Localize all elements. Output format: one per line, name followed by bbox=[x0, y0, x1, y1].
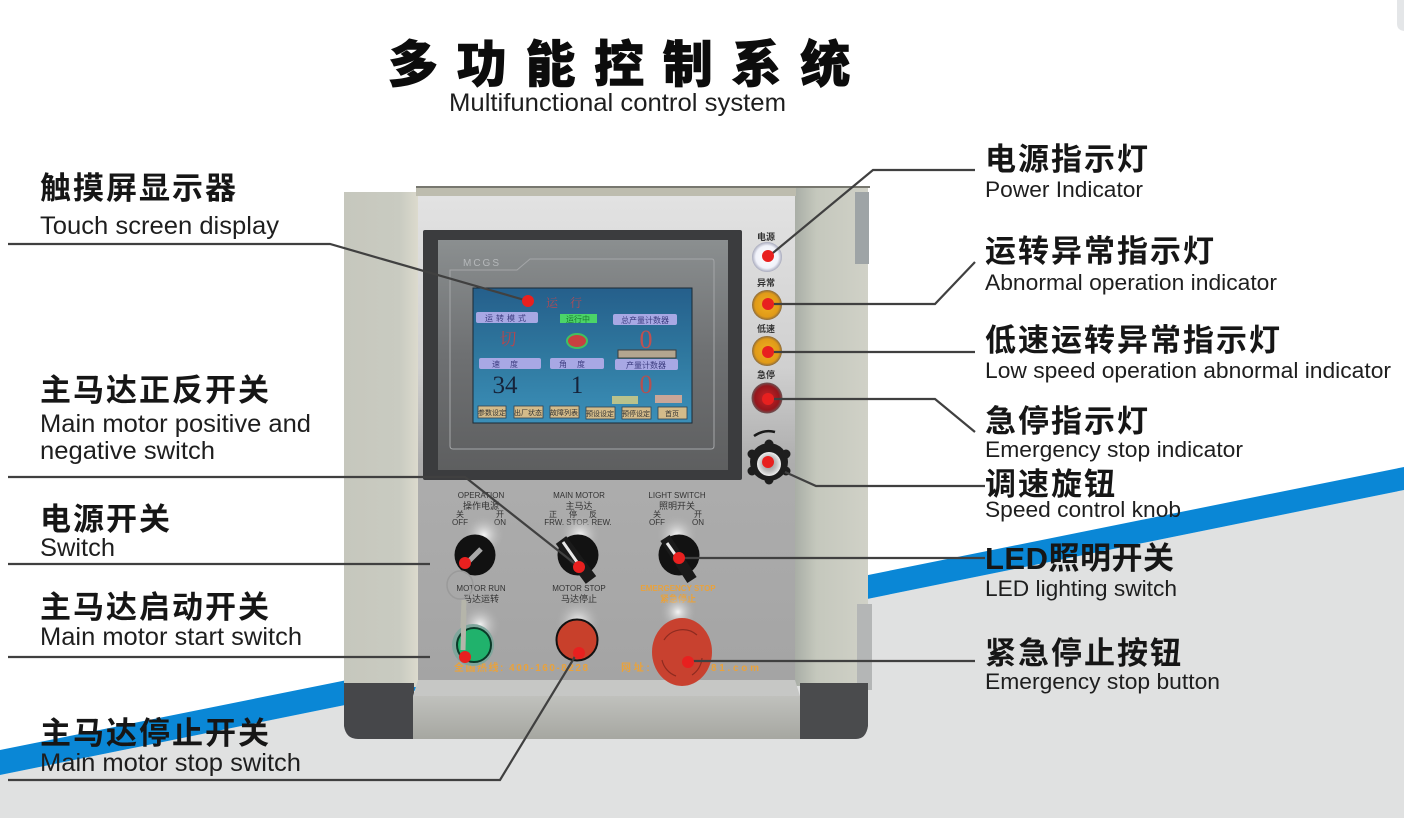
switch labels: 网址: www.8881.com bbox=[621, 661, 759, 674]
right hinges bbox=[855, 192, 869, 264]
label: LED lighting switch: LED照明开关 bbox=[985, 541, 1176, 576]
indicator lights: 电源 bbox=[757, 231, 775, 242]
label: main motor stop: 主马达停止开关 bbox=[40, 716, 271, 751]
label: power indicator bbox=[985, 142, 1150, 202]
indicator lights: 低速 bbox=[757, 323, 775, 334]
switch labels: 开 bbox=[496, 510, 504, 519]
label: main motor stop bbox=[40, 716, 301, 777]
switch labels: 关 bbox=[653, 509, 661, 519]
label: main motor switch: negative switch bbox=[40, 437, 215, 465]
label: speed control knob bbox=[985, 467, 1181, 522]
bottom lip bbox=[413, 680, 800, 696]
background: gray floor bbox=[0, 490, 1404, 818]
callout dots bbox=[459, 250, 774, 668]
label: main motor start bbox=[40, 590, 302, 651]
label: emergency stop button bbox=[985, 636, 1220, 694]
label: low speed abnormal indicator: 低速运转异常指示灯 bbox=[985, 323, 1282, 358]
screen contents: 运转模式 bbox=[485, 313, 529, 323]
label: speed control knob: 调速旋钮 bbox=[985, 467, 1117, 502]
screen contents: 参数设定 bbox=[478, 408, 506, 417]
switch labels: LIGHT SWITCH bbox=[648, 491, 706, 500]
screen contents: 1 bbox=[571, 372, 583, 399]
label: main motor switch: 主马达正反开关 bbox=[40, 373, 271, 408]
switch labels: OPERATION bbox=[458, 491, 504, 500]
left frame bbox=[344, 192, 418, 687]
switch labels: ON bbox=[494, 518, 506, 527]
light selector bbox=[657, 515, 700, 580]
control cabinet bbox=[344, 186, 872, 739]
label: emergency stop indicator: 急停指示灯 bbox=[985, 404, 1150, 439]
screen contents: 首页 bbox=[665, 409, 679, 418]
indicator lights: 急停 bbox=[757, 369, 775, 380]
green start button bbox=[452, 605, 500, 666]
indicator lights bbox=[752, 231, 782, 414]
touch screen bbox=[423, 230, 742, 480]
label: LED lighting switch: LED lighting switch bbox=[985, 576, 1177, 601]
screen contents: 运行中 bbox=[566, 314, 590, 324]
label: switch: Switch bbox=[40, 534, 115, 562]
background: blue diagonal band bbox=[0, 467, 1404, 775]
switch labels: MOTOR STOP bbox=[552, 584, 606, 593]
switch labels: OFF bbox=[649, 518, 665, 527]
label: power indicator: 电源指示灯 bbox=[985, 142, 1150, 177]
label: main motor stop: Main motor stop switch bbox=[40, 749, 301, 777]
screen contents: 预设设定 bbox=[586, 409, 614, 418]
label: power indicator: Power Indicator bbox=[985, 177, 1144, 202]
label: speed control knob: Speed control knob bbox=[985, 497, 1181, 522]
label: touch screen display: Touch screen display bbox=[40, 212, 280, 240]
switch labels: ON bbox=[692, 518, 704, 527]
label: touch screen display: 触摸屏显示器 bbox=[40, 171, 238, 206]
switch labels: 全国热线: 400-160-8228 bbox=[454, 661, 588, 674]
main motor selector bbox=[558, 515, 600, 580]
screen contents: 角度 bbox=[559, 359, 595, 369]
right frame bbox=[795, 186, 868, 686]
screen contents: 0 bbox=[640, 325, 652, 354]
screen contents: 切 bbox=[500, 330, 516, 349]
switch labels: OFF bbox=[452, 518, 468, 527]
switch labels: FRW. STOP. REW. bbox=[544, 518, 612, 527]
switch labels: 马达运转 bbox=[463, 593, 499, 604]
switch labels: 主马达 bbox=[565, 500, 593, 511]
label: abnormal operation indicator bbox=[985, 234, 1278, 295]
switch labels: 操作电源 bbox=[463, 500, 499, 511]
label: main motor start: 主马达启动开关 bbox=[40, 590, 271, 625]
switch labels: EMERGENCY STOP bbox=[640, 584, 716, 593]
title: Multifunctional control system bbox=[449, 89, 786, 117]
speed knob bbox=[748, 431, 790, 484]
screen contents: 速度 bbox=[492, 359, 528, 369]
label: emergency stop button: 紧急停止按钮 bbox=[985, 636, 1183, 671]
key switch bbox=[447, 515, 504, 650]
screen contents: 34 bbox=[492, 372, 518, 399]
red stop button bbox=[556, 600, 600, 660]
label: emergency stop indicator bbox=[985, 404, 1244, 462]
indicator lights: 异常 bbox=[757, 277, 775, 288]
switch labels: MOTOR RUN bbox=[456, 584, 506, 593]
label: abnormal operation indicator: 运转异常指示灯 bbox=[985, 234, 1216, 269]
screen contents: 故障列表 bbox=[550, 408, 578, 417]
switch labels: 紧急停止 bbox=[660, 593, 696, 604]
switch labels bbox=[452, 491, 759, 674]
touch screen: MCGS bbox=[463, 258, 501, 269]
label: switch: 电源开关 bbox=[40, 502, 172, 537]
screen contents: 产量计数器 bbox=[626, 360, 666, 370]
label: switch bbox=[40, 502, 172, 562]
corner mark bbox=[1397, 0, 1404, 31]
label: touch screen display bbox=[40, 171, 280, 240]
switch labels: MAIN MOTOR bbox=[553, 491, 605, 500]
bottom feet bbox=[344, 683, 414, 739]
label: main motor switch bbox=[40, 373, 311, 465]
screen contents: 预停设定 bbox=[622, 409, 650, 418]
switch labels: 马达停止 bbox=[561, 593, 597, 604]
label: main motor switch: Main motor positive and bbox=[40, 410, 311, 438]
label: low speed abnormal indicator: Low speed operation abnormal indicator bbox=[985, 358, 1392, 383]
label: LED lighting switch bbox=[985, 541, 1177, 601]
screen contents bbox=[476, 296, 687, 419]
screen contents: 运行 bbox=[546, 296, 594, 310]
label: low speed abnormal indicator bbox=[985, 323, 1392, 383]
screen contents: 总产量计数器 bbox=[621, 315, 669, 325]
label: abnormal operation indicator: Abnormal operation indicator bbox=[985, 270, 1278, 295]
title: 多功能控制系统 bbox=[388, 37, 869, 93]
leader lines bbox=[8, 170, 985, 780]
screen contents: 出厂状态 bbox=[514, 408, 542, 417]
switch labels: 关 bbox=[456, 509, 464, 519]
top edge bbox=[416, 186, 796, 196]
label: emergency stop indicator: Emergency stop indicator bbox=[985, 437, 1244, 462]
emergency stop mushroom bbox=[652, 594, 712, 686]
metal panel bbox=[418, 196, 795, 684]
switch labels: 正停反 bbox=[549, 509, 609, 519]
label: main motor start: Main motor start switch bbox=[40, 623, 302, 651]
switch labels: 开 bbox=[694, 510, 702, 519]
switch labels: 照明开关 bbox=[659, 500, 695, 511]
screen contents: 0 bbox=[640, 370, 652, 399]
label: emergency stop button: Emergency stop button bbox=[985, 669, 1220, 694]
